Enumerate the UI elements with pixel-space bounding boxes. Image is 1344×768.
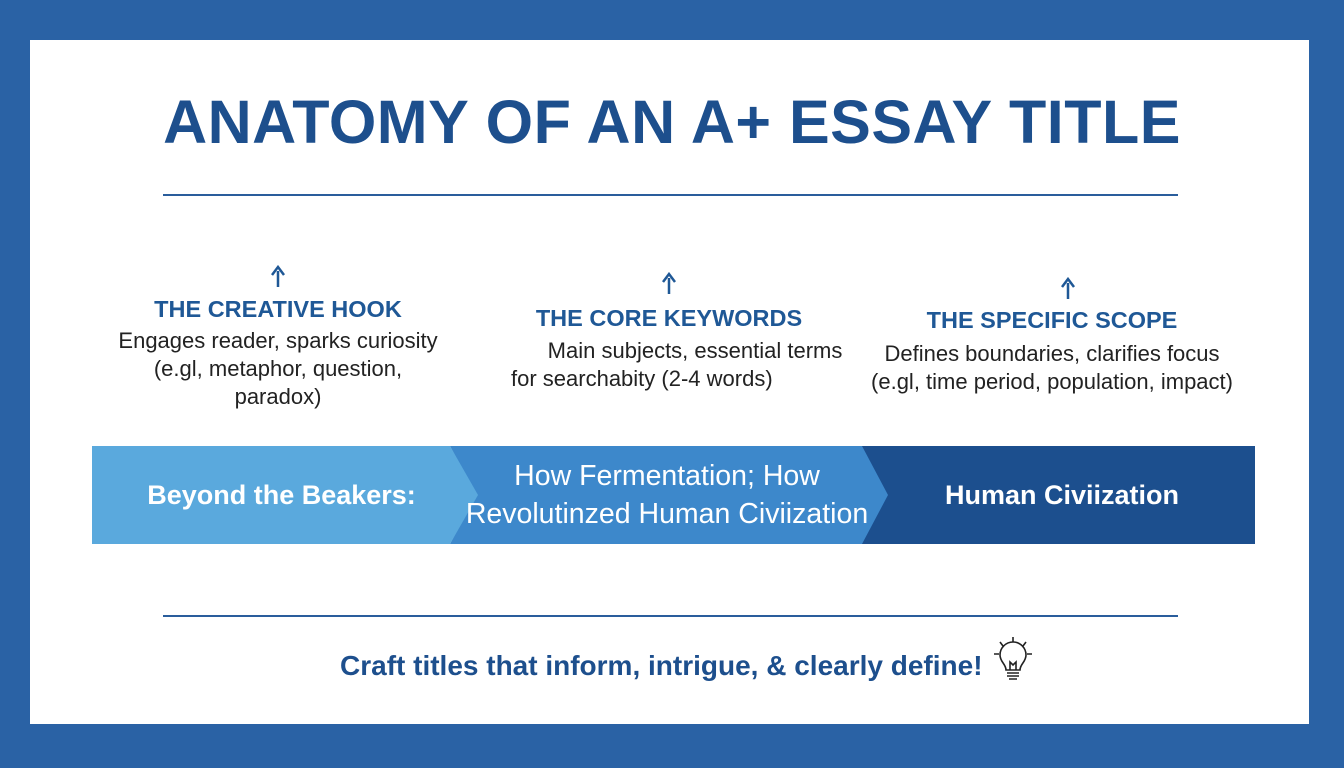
segment text: keywords: Revolutinzed Human Civiization: [466, 498, 868, 530]
icon: arrow up: [1061, 277, 1075, 299]
description: [118, 328, 438, 409]
description: Defines boundaries, clarifies focus: [884, 341, 1220, 366]
segment text: scope: Human Civiization: [945, 480, 1179, 510]
column: core keywords: [511, 272, 842, 391]
column: specific scope: [871, 277, 1233, 394]
segment text: keywords: [466, 460, 868, 530]
heading: THE CORE KEYWORDS: [536, 305, 802, 331]
heading: THE SPECIFIC SCOPE: [927, 307, 1177, 333]
icon: arrow up: [271, 265, 285, 287]
heading: THE CREATIVE HOOK: [154, 296, 402, 322]
banner: example title: [92, 446, 1255, 544]
footer tagline: Craft titles that inform, intrigue, & clearly define!: [340, 650, 983, 681]
description: [511, 338, 842, 391]
description: paradox): [235, 384, 321, 409]
segment text: hook: Beyond the Beakers:: [147, 480, 416, 510]
title: ANATOMY OF AN A+ ESSAY TITLE: [163, 88, 1181, 156]
description: (e.gl, time period, population, impact): [871, 369, 1233, 394]
description: Main subjects, essential terms: [548, 338, 842, 363]
segment text: keywords: How Fermentation; How: [514, 460, 820, 492]
description: (e.gl, metaphor, question,: [154, 356, 402, 381]
description: Engages reader, sparks curiosity: [118, 328, 438, 353]
icon: arrow up: [662, 272, 676, 294]
icon: lightbulb: [994, 637, 1032, 680]
column: creative hook: [118, 265, 438, 409]
description: for searchabity (2-4 words): [511, 366, 773, 391]
description: [871, 341, 1233, 394]
